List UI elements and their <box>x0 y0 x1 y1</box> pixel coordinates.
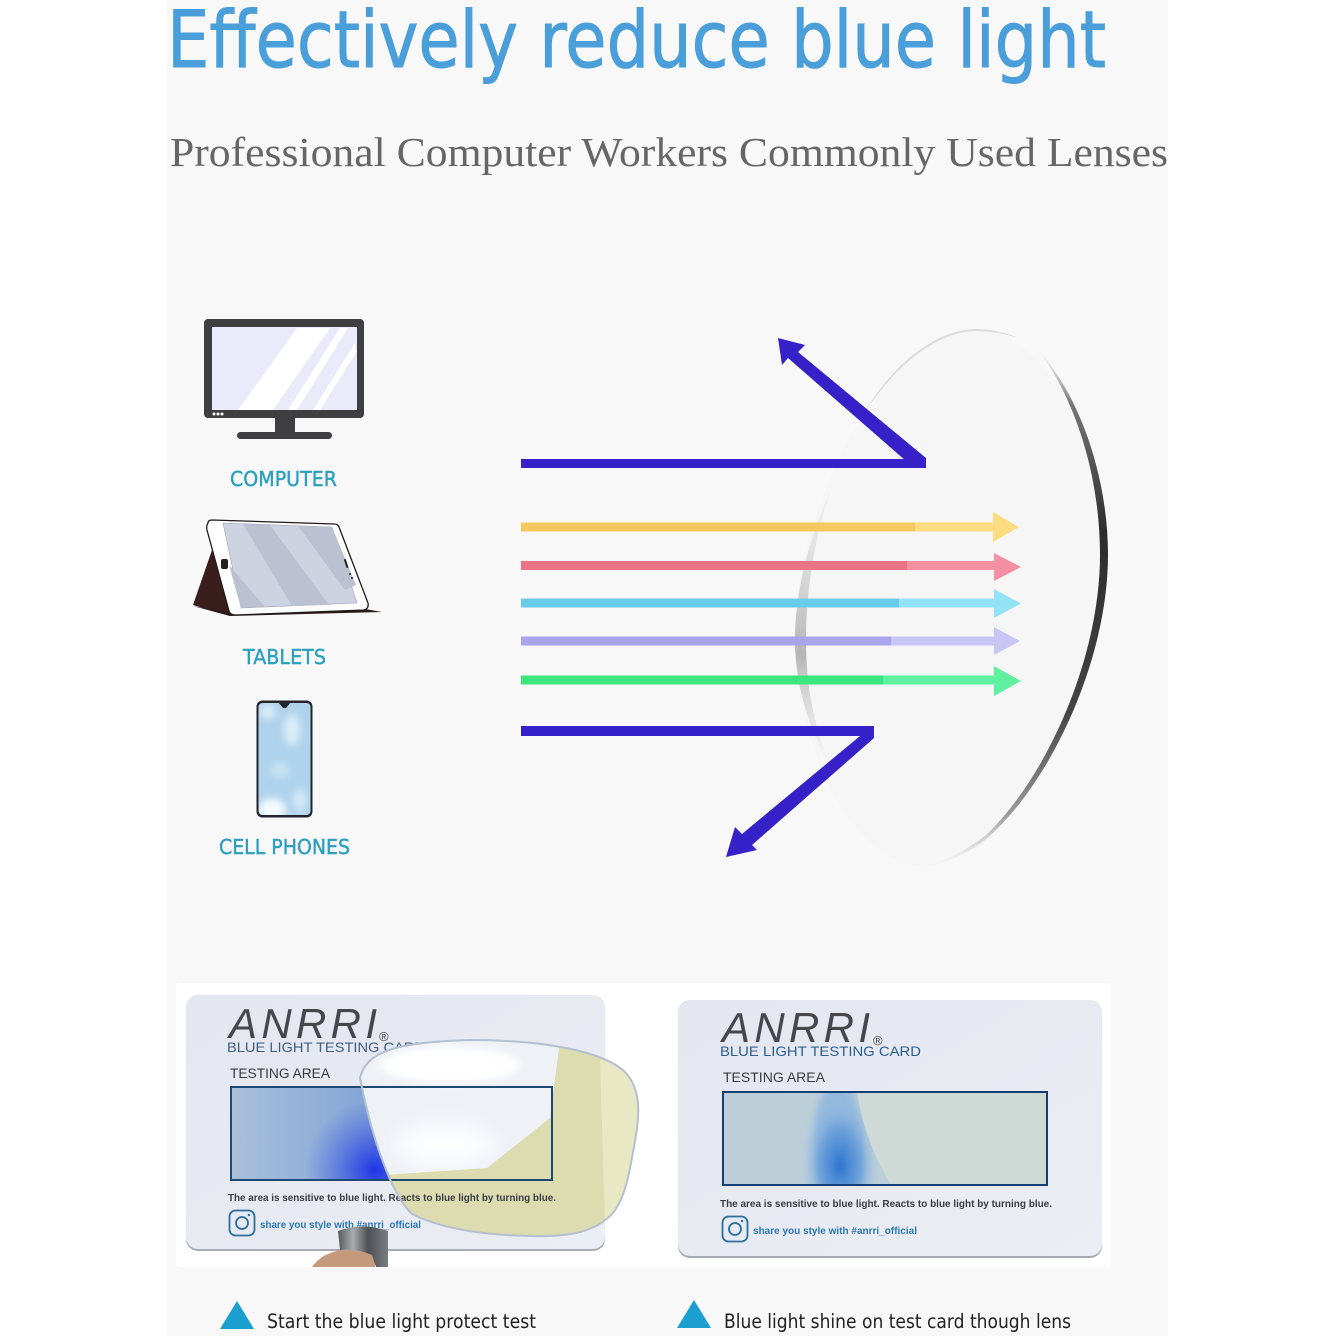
caption: right: Blue light shine on test card though lens <box>724 1310 1071 1333</box>
icon: tablet on stand <box>193 520 382 616</box>
icon: computer monitor <box>204 319 364 439</box>
card: result through lens: ® <box>873 1033 883 1048</box>
card: result through lens: TESTING AREA <box>723 1070 825 1085</box>
label: tablets: TABLETS <box>242 645 326 669</box>
card: result through lens: The area is sensitive to blue light. Reacts to blue light by turning blue. <box>720 1198 1052 1210</box>
photo strip: test cards <box>176 983 1111 1267</box>
icon: cell phone <box>256 700 312 822</box>
subtitle: Professional Computer Workers Commonly Used Lenses <box>170 129 1168 175</box>
arrow: red light passing through <box>521 553 1021 581</box>
lens held over card: Reacts to blue light by turning blue. <box>388 1192 556 1204</box>
lens disc <box>795 329 1108 866</box>
arrow: green light passing through <box>521 666 1021 696</box>
page background panel <box>167 0 1168 1336</box>
card: result through lens <box>678 1000 1102 1258</box>
caption: right <box>677 1300 1071 1333</box>
arrow: cyan light passing through <box>521 589 1021 618</box>
lens held over card <box>355 1035 645 1240</box>
lens diagram <box>521 329 1108 866</box>
card: result through lens: BLUE LIGHT TESTING CARD <box>720 1043 921 1059</box>
arrow: reflected blue light top <box>521 338 926 468</box>
caption: left: Start the blue light protect test <box>267 1310 536 1333</box>
card: test with lens: ® <box>379 1029 389 1044</box>
fingers holding the lens <box>312 1226 388 1267</box>
card: result through lens: ANRRI <box>719 1004 870 1051</box>
card: test with lens: share you style with #anrri_official <box>260 1219 421 1231</box>
card: test with lens <box>186 995 605 1251</box>
arrow: yellow light passing through <box>521 512 1019 542</box>
photo background <box>176 983 1111 1267</box>
card: test with lens: The area is sensitive to blue light. Reacts to blue light by turning blue. <box>228 1192 556 1204</box>
card: test with lens: TESTING AREA <box>230 1066 330 1081</box>
card: test with lens: BLUE LIGHT TESTING CARD <box>227 1039 425 1055</box>
label: cell phones: CELL PHONES <box>219 835 350 859</box>
arrow: purple light passing through <box>521 627 1020 655</box>
arrow: reflected blue light bottom <box>521 726 874 857</box>
device column <box>193 319 382 859</box>
card: result through lens: share you style with #anrri_official <box>753 1225 917 1237</box>
card: test with lens: ANRRI <box>226 1000 377 1047</box>
caption: left <box>220 1301 536 1333</box>
label: computer: COMPUTER <box>230 467 337 491</box>
